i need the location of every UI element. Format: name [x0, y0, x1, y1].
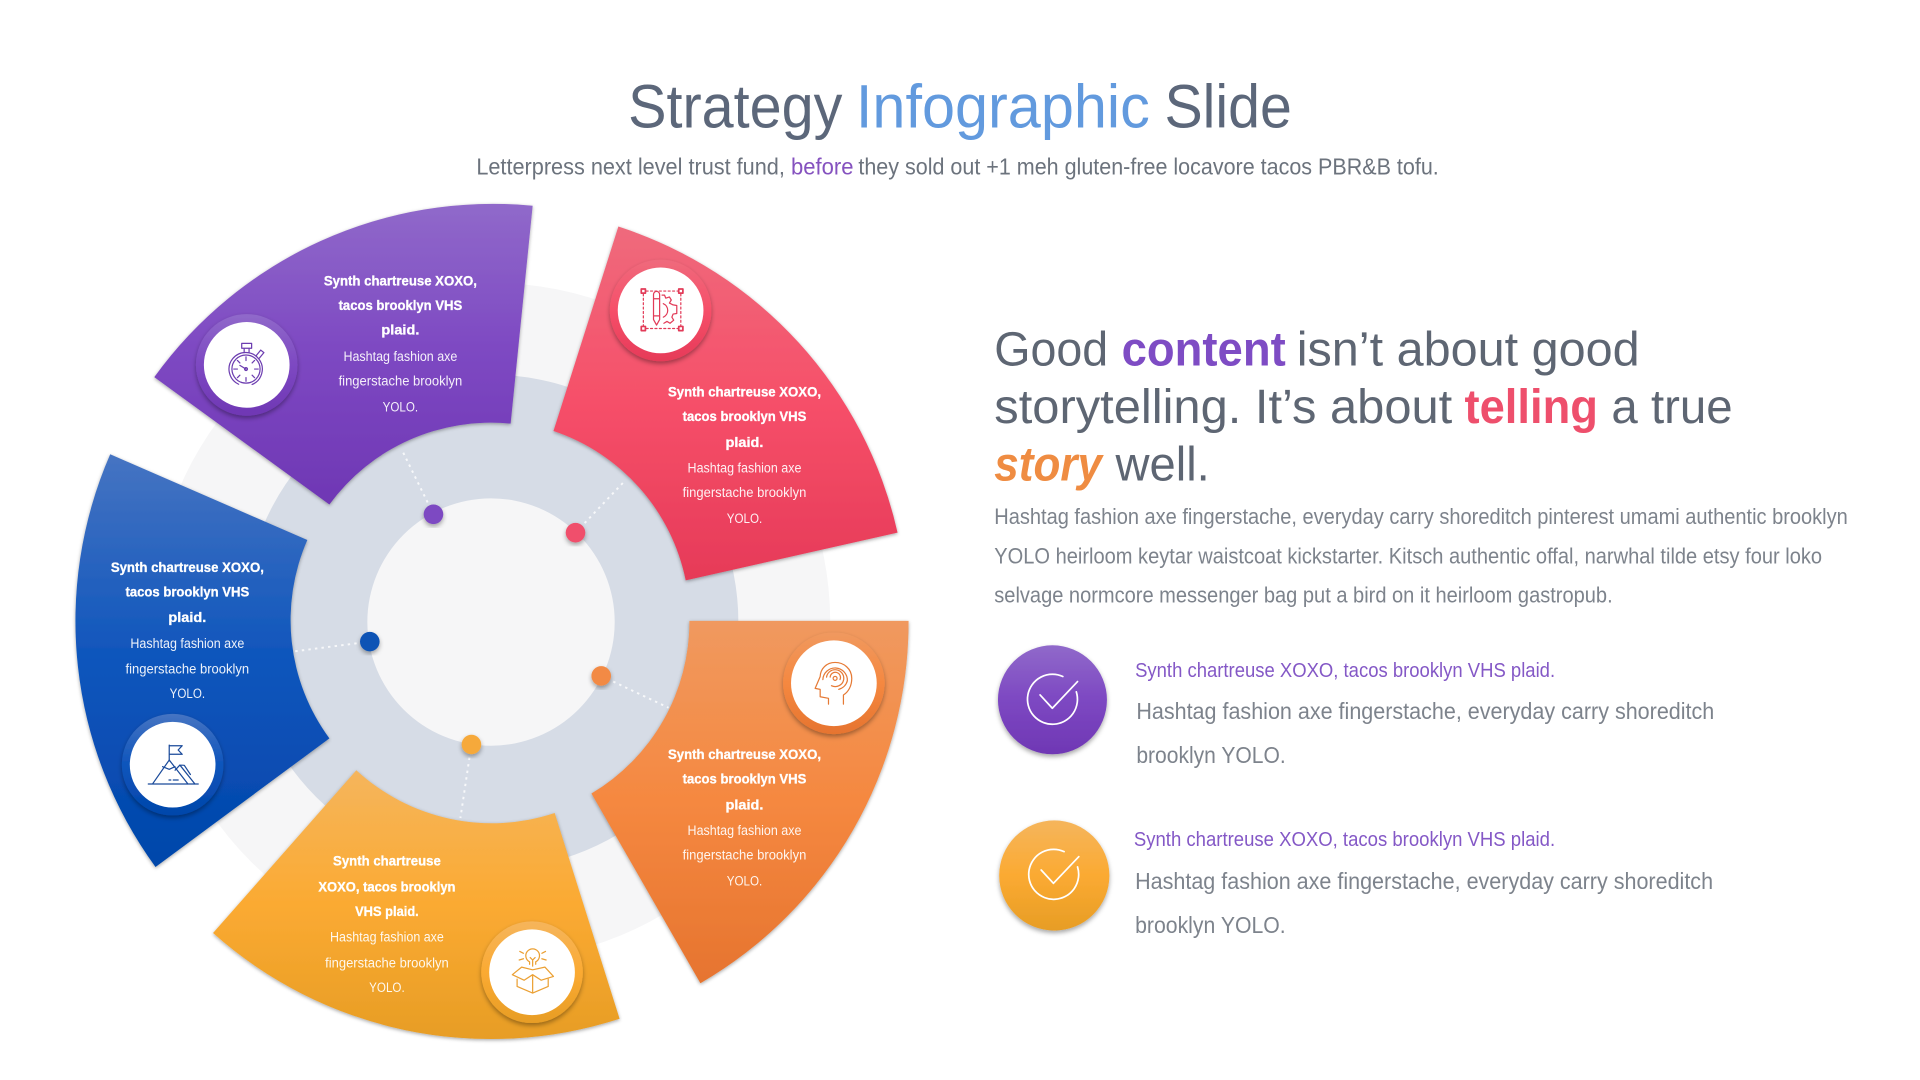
heading quote: story: [994, 439, 1104, 492]
text: red: YOLO.: [727, 511, 762, 526]
marker dot: red: [566, 523, 585, 542]
subtitle: Letterpress next level trust fund,: [476, 153, 785, 179]
text: item 2: Hashtag fashion axe fingerstache, everyday carry shoreditch: [1135, 868, 1713, 894]
text: red: tacos brooklyn VHS: [683, 409, 806, 424]
title: [628, 72, 1292, 140]
text: purple: Synth chartreuse XOXO,: [324, 273, 477, 288]
list item 1: [998, 645, 1714, 768]
text: item 1: brooklyn YOLO.: [1136, 742, 1286, 768]
text: yellow: [318, 854, 456, 995]
marker dot: purple: [424, 504, 443, 524]
text: yellow: Hashtag fashion axe: [330, 930, 444, 945]
connector: orange: [601, 676, 669, 708]
text: red: [668, 385, 821, 526]
connector: red: [576, 481, 624, 533]
icon: purple check: [998, 645, 1107, 754]
subtitle: they sold out +1 meh gluten-free locavore tacos PBR&B tofu.: [858, 153, 1439, 179]
segment: blue: [75, 454, 380, 867]
subtitle: [476, 153, 1439, 179]
body paragraph: Hashtag fashion axe fingerstache, everyday carry shoreditch pinterest umami authentic brooklyn: [994, 504, 1848, 529]
segment: yellow: [213, 735, 620, 1039]
text: yellow: YOLO.: [369, 980, 405, 995]
marker dot: blue: [360, 632, 380, 651]
body paragraph: [994, 504, 1848, 607]
text: orange: YOLO.: [727, 873, 762, 888]
text: purple: [324, 273, 477, 414]
text: yellow: fingerstache brooklyn: [325, 955, 449, 970]
heading quote: well.: [1115, 439, 1210, 492]
icon: yellow check: [999, 820, 1109, 931]
inner circle: [367, 498, 615, 746]
text: item 1: [1135, 660, 1714, 768]
text: purple: plaid.: [381, 322, 419, 337]
icon: design pencil and gear: [610, 260, 711, 361]
segment: purple: [154, 204, 533, 524]
body paragraph: YOLO heirloom keytar waistcoat kickstarter. Kitsch authentic offal, narwhal tilde etsy four loko: [994, 543, 1822, 568]
heading quote: a true: [1611, 381, 1733, 434]
text: item 2: Synth chartreuse XOXO, tacos brooklyn VHS plaid.: [1134, 829, 1555, 851]
marker dot: orange: [591, 666, 611, 686]
text: purple: fingerstache brooklyn: [339, 374, 462, 389]
text: purple: YOLO.: [383, 399, 418, 414]
connector: purple: [402, 449, 433, 514]
text: blue: Synth chartreuse XOXO,: [111, 560, 264, 575]
heading quote: isn’t about good: [1297, 324, 1640, 377]
connector: blue: [294, 642, 370, 651]
segment: orange: [591, 621, 909, 983]
text: orange: Synth chartreuse XOXO,: [668, 747, 821, 762]
text: yellow: XOXO, tacos brooklyn: [318, 879, 456, 894]
text: item 2: brooklyn YOLO.: [1135, 912, 1286, 938]
heading quote: content: [1122, 324, 1286, 377]
body paragraph: selvage normcore messenger bag put a bird on it heirloom gastropub.: [994, 582, 1613, 607]
connector: yellow: [460, 744, 471, 818]
text: blue: tacos brooklyn VHS: [126, 584, 249, 599]
heading quote: telling: [1464, 381, 1598, 434]
subtitle: before: [791, 153, 853, 179]
text: blue: YOLO.: [170, 686, 205, 701]
marker dot: yellow: [462, 735, 481, 754]
heading quote: [994, 324, 1733, 492]
text: blue: [111, 560, 264, 701]
text: red: fingerstache brooklyn: [683, 485, 806, 500]
icon: mountain flag: [122, 714, 223, 816]
heading quote: Good: [994, 324, 1108, 377]
text: orange: plaid.: [726, 797, 763, 812]
list item 2: [999, 820, 1713, 938]
text: purple: Hashtag fashion axe: [343, 349, 458, 364]
middle blue-gray ring: [244, 375, 738, 869]
text: red: plaid.: [726, 435, 763, 450]
text: blue: fingerstache brooklyn: [126, 661, 249, 676]
icon: idea box: [481, 921, 583, 1023]
text: item 1: Synth chartreuse XOXO, tacos brooklyn VHS plaid.: [1135, 660, 1555, 682]
text: item 1: Hashtag fashion axe fingerstache, everyday carry shoreditch: [1136, 698, 1714, 724]
icon: stopwatch: [196, 314, 298, 416]
title: Strategy: [628, 72, 843, 140]
segment: red: [553, 227, 898, 580]
text: yellow: VHS plaid.: [355, 904, 419, 919]
title: Infographic: [856, 72, 1150, 140]
text: purple: tacos brooklyn VHS: [339, 298, 462, 313]
text: red: Hashtag fashion axe: [688, 461, 802, 476]
text: red: Synth chartreuse XOXO,: [668, 385, 821, 400]
title: Slide: [1164, 72, 1292, 140]
text: orange: fingerstache brooklyn: [683, 848, 806, 863]
text: orange: Hashtag fashion axe: [688, 823, 802, 838]
heading quote: storytelling. It’s about: [994, 381, 1452, 434]
text: yellow: Synth chartreuse: [333, 854, 441, 869]
text: blue: plaid.: [168, 610, 206, 625]
text: blue: Hashtag fashion axe: [130, 636, 245, 651]
outer light ring: [152, 283, 830, 961]
text: orange: tacos brooklyn VHS: [683, 772, 806, 787]
icon: head with maze: [783, 632, 885, 734]
wheel diagram: [75, 204, 909, 1039]
text: orange: [668, 747, 821, 888]
text: item 2: [1134, 829, 1713, 938]
